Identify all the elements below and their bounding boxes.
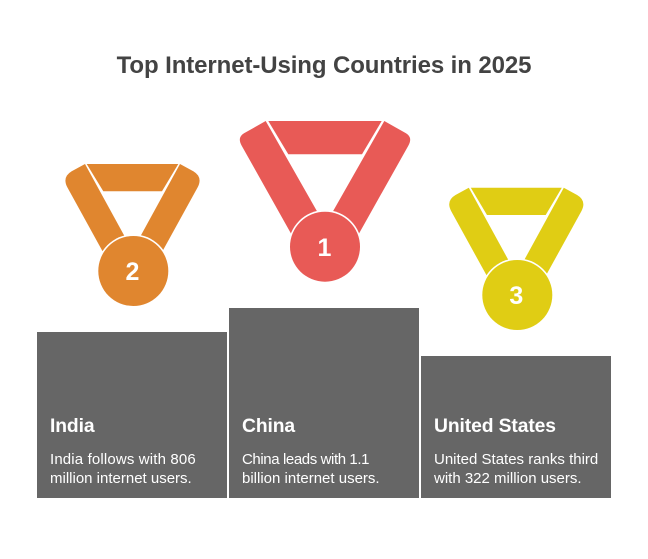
icon: medal 3 [449,188,583,332]
icon: medal 2 [65,164,200,308]
icon: medal 1: 1 [318,234,332,262]
text: United States description [434,451,598,487]
text: China description: billion internet users. [242,470,380,487]
panel: India podium [37,332,227,498]
panel: United States podium [421,356,611,498]
icon: medal 2: 2 [126,258,139,286]
text: India description: India follows with 806 [50,451,196,468]
text: India description [50,451,196,487]
heading: India: India [50,416,94,437]
text: United States description: with 322 million users. [434,470,582,487]
text: India description: million internet users. [50,470,192,487]
heading: United States: United States [434,416,556,437]
panel: China podium [229,308,419,498]
heading: China: China [242,416,295,437]
text: China description [242,451,380,487]
icon: medal 3: 3 [509,282,523,310]
title: Top Internet-Using Countries in 2025 [117,52,531,79]
text: China description: China leads with 1.1 [242,451,369,468]
icon: medal 1 [240,121,410,283]
text: United States description: United States ranks third [434,451,598,468]
